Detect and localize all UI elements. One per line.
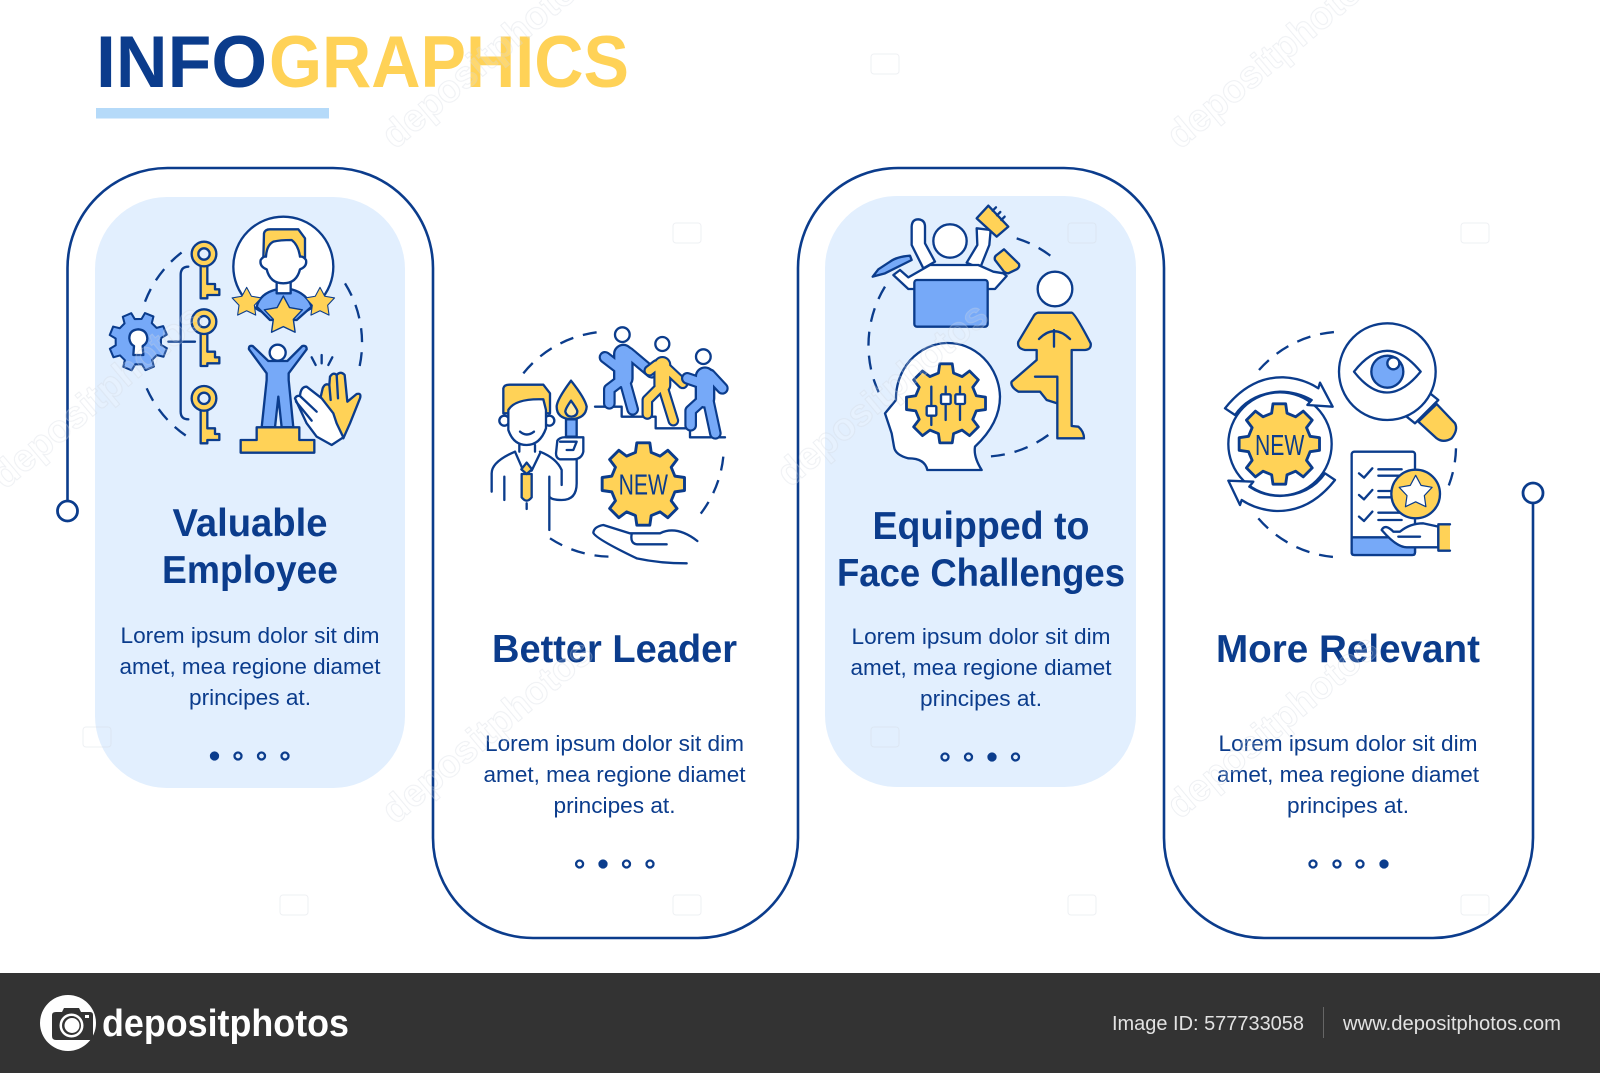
watermark: repeated depositphotos marks: depositphotos	[1159, 626, 1386, 827]
pagination dots: panel 4	[1310, 860, 1388, 868]
icon: clapping hands	[295, 355, 360, 445]
text: more relevant body: principes at.	[1287, 793, 1409, 818]
icon: leader with torch	[492, 381, 587, 530]
text: equipped body	[850, 624, 1112, 711]
icon: valuable employee illustration	[101, 217, 362, 453]
watermark: repeated depositphotos marks	[0, 0, 1489, 915]
text: valuable employee body: principes at.	[189, 685, 311, 710]
icon: new gear with cycle arrows	[1225, 377, 1335, 511]
heading: valuable employee: Valuable	[172, 502, 328, 545]
text: better leader body	[484, 731, 746, 818]
footer logo	[40, 995, 349, 1051]
pagination dots: panel 1	[211, 752, 288, 760]
icon: multitasking person at laptop	[873, 206, 1019, 327]
text: equipped body: amet, mea regione diamet	[850, 655, 1112, 680]
text: more relevant body: Lorem ipsum dolor sit dim	[1218, 731, 1478, 756]
icon: team climbing stairs	[595, 327, 725, 437]
pagination dots: panel 3	[942, 754, 1019, 760]
text: equipped body: principes at.	[920, 686, 1042, 711]
icon: new gear on open hand: NEW	[619, 469, 668, 501]
icon: head with settings gear	[885, 343, 1000, 470]
icon: three keys	[192, 242, 219, 443]
heading: better leader: Better Leader	[492, 628, 737, 671]
text: more relevant body: amet, mea regione diamet	[1217, 762, 1480, 787]
text: equipped body: Lorem ipsum dolor sit dim	[852, 624, 1110, 649]
text: valuable employee body	[120, 623, 381, 710]
title underline	[96, 108, 329, 118]
icon: better leader illustration	[492, 327, 725, 563]
text: valuable employee body: Lorem ipsum dolor sit dim	[120, 623, 380, 648]
panel background: valuable employee	[95, 197, 405, 788]
heading: valuable employee	[162, 502, 338, 592]
text: better leader body: principes at.	[554, 793, 676, 818]
text: valuable employee body: amet, mea regione diamet	[120, 654, 381, 679]
footer site url: www.depositphotos.com	[1342, 1013, 1561, 1035]
heading: valuable employee: Employee	[162, 549, 338, 592]
title: GRAPHICS	[269, 22, 629, 103]
icon: employee portrait with stars	[232, 217, 335, 332]
footer image id: Image ID: 577733058	[1112, 1013, 1304, 1035]
text: better leader body: amet, mea regione diamet	[484, 762, 746, 787]
watermark: repeated depositphotos marks: depositphotos	[769, 294, 996, 495]
heading: equipped to face challenges: Equipped to	[872, 505, 1090, 548]
text: more relevant body	[1217, 731, 1480, 818]
icon: checklist with star badge and hand	[1352, 452, 1450, 555]
serpentine outline connecting the four panels	[58, 168, 1543, 938]
heading: more relevant: More Relevant	[1216, 628, 1480, 671]
title: INFO	[96, 22, 267, 103]
icon: more relevant illustration	[1225, 323, 1456, 557]
footer bar	[0, 973, 1600, 1073]
icon: magnifier with eye	[1339, 323, 1456, 441]
icon: winner on podium	[241, 345, 314, 453]
icon: equipped to face challenges illustration	[868, 206, 1091, 470]
icon: balancing yoga pose	[1011, 272, 1091, 438]
title	[96, 22, 629, 103]
pagination dots: panel 2	[576, 860, 654, 868]
heading: equipped to face challenges: Face Challenges	[837, 552, 1125, 595]
panel background: equipped to face challenges	[825, 196, 1136, 787]
text: better leader body: Lorem ipsum dolor sit dim	[485, 731, 744, 756]
heading: equipped to face challenges	[837, 505, 1125, 595]
footer logo: depositphotos	[102, 1003, 349, 1045]
watermark: repeated depositphotos marks: depositphotos	[374, 631, 601, 832]
icon: keyhole gear	[101, 304, 176, 379]
icon: new gear with cycle arrows: NEW	[1255, 430, 1304, 462]
icon: new gear on open hand	[593, 443, 697, 563]
